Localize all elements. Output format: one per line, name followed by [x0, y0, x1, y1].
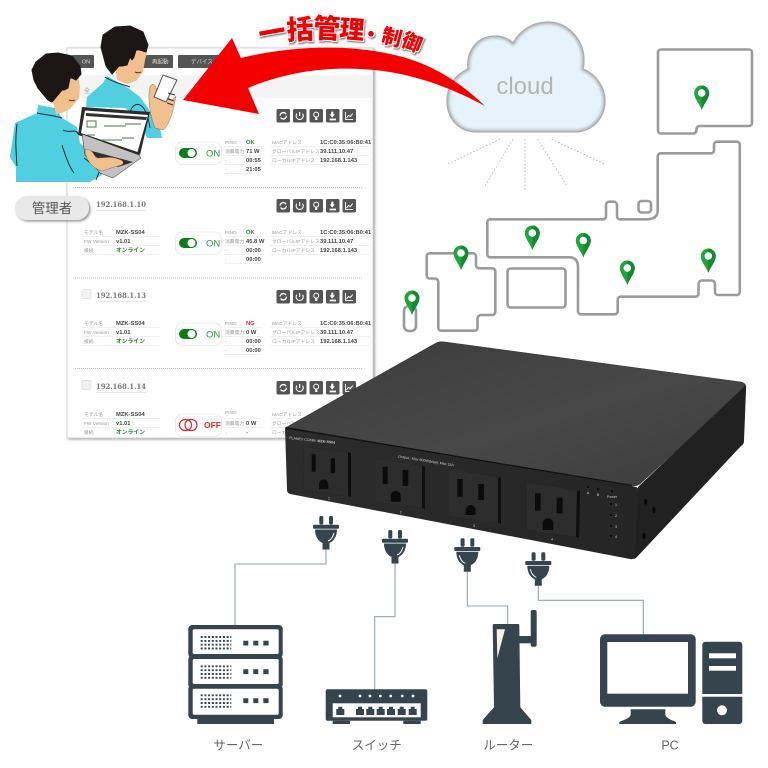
device row 3: 192.168.1.13: - [225, 340, 227, 345]
icon: cloud [447, 22, 605, 132]
pin: Fukuoka [454, 246, 468, 270]
band label: 全 [84, 87, 90, 95]
Sado island [638, 201, 651, 212]
device side face [632, 386, 746, 559]
device row 2: 192.168.1.10: - [225, 249, 227, 254]
device row 3: 192.168.1.13: 00:00 [246, 339, 261, 345]
device row 2: 192.168.1.10: FW Version [84, 239, 109, 245]
outlet 4: 4 [551, 538, 553, 542]
divider [75, 186, 362, 188]
device row 3: 192.168.1.13: 00:00 [246, 348, 261, 354]
outlet 2: 2 [400, 510, 402, 514]
status LEDs: A [587, 491, 590, 495]
device row 2: 192.168.1.10: MZK-SS04 [116, 230, 145, 236]
device row 1: 192.168.1.143 [320, 158, 358, 164]
device row 2: 192.168.1.10: 接続 [84, 247, 94, 254]
icon: server rack [188, 625, 283, 724]
device row 3: 192.168.1.13: 39.111.10.47 [320, 330, 353, 336]
status LEDs: 4 [615, 535, 617, 539]
device row 2: 192.168.1.10: - [225, 258, 227, 263]
device row 2: 192.168.1.10: OK [246, 230, 256, 236]
heading: 一括管理・制御: 管 [313, 13, 341, 44]
device row 2: 192.168.1.10: 39.111.10.47 [320, 239, 353, 245]
output rating label: Output : Max 800W(total), Max 15A [398, 455, 455, 467]
Okinawa [404, 306, 416, 331]
device row 4: 192.168.1.14 [82, 380, 370, 436]
signal rays from cloud [447, 139, 605, 192]
device row 2: 192.168.1.10: モデル名 [84, 229, 103, 236]
device row 4: 192.168.1.14: 接続 [84, 429, 94, 436]
device row 1: OK [246, 140, 256, 146]
device row 4: 192.168.1.14: ローカルIPアドレス [272, 430, 315, 436]
front person [10, 53, 102, 182]
icon: network switch [326, 689, 427, 724]
icon: router [483, 610, 537, 724]
phone and hand [149, 75, 177, 130]
Shikoku [508, 268, 566, 308]
device row 3: 192.168.1.13: モデル名 [84, 320, 103, 327]
icon: desktop PC [600, 634, 742, 724]
device row 3: 192.168.1.13: 1C:C0:35:06:B0:41 [320, 321, 372, 327]
device: MZK-SS04 smart power strip [285, 342, 746, 559]
device row 3: 192.168.1.13: 192.168.1.143 [320, 339, 358, 345]
device row 1: 00:55 [246, 158, 262, 164]
device row 3: 192.168.1.13: オンライン [116, 338, 145, 345]
device row 2: 192.168.1.10: 00:00 [246, 248, 261, 254]
device row 2: 192.168.1.10: オンライン [116, 247, 145, 254]
device row 2: 192.168.1.10: v1.01 [116, 239, 131, 245]
device row 4: 192.168.1.14: 0 W [246, 421, 257, 427]
device row 3: 192.168.1.13: 192.168.1.13 [96, 291, 146, 300]
heading: 一括管理・制御: ・ [361, 24, 381, 46]
device row 1: グローバルIPアドレス [272, 148, 320, 155]
device row 4: 192.168.1.14: モデル名 [84, 411, 103, 418]
outlet 4 [527, 483, 580, 542]
wires [235, 549, 643, 689]
device row 1: ローカルIPアドレス [272, 158, 315, 164]
status LEDs: Power [607, 495, 618, 499]
device row 4: 192.168.1.14: オンライン [116, 429, 145, 436]
toolbar buttons [72, 55, 240, 68]
device row 3: 192.168.1.13: FW Version [84, 330, 109, 336]
Hokkaido [658, 50, 752, 134]
device row 3: 192.168.1.13: MZK-SS04 [116, 321, 145, 327]
plug 3 [454, 538, 480, 572]
pin: central [576, 233, 591, 258]
device row 1: 消費電力 [225, 148, 244, 155]
device row 3: 192.168.1.13: NG [246, 321, 255, 327]
device row 2: 192.168.1.10: 消費電力 [225, 238, 244, 245]
device row 4: 192.168.1.14: PING [225, 410, 237, 416]
front top edge highlight [286, 428, 632, 486]
heading: 一括管理・制御: 制 [379, 24, 404, 52]
status LEDs: 2 [615, 514, 617, 518]
toolbar buttons: 再起動 [152, 58, 169, 66]
device row 1 [176, 109, 372, 174]
divider [75, 368, 362, 370]
device row 3: 192.168.1.13: MACアドレス [272, 321, 302, 327]
device row 4: 192.168.1.14: - [246, 430, 248, 436]
side screw holes [642, 499, 656, 539]
heading: 一括管理・制御: 理 [338, 15, 366, 45]
laptop [78, 107, 150, 178]
map of Japan [404, 50, 752, 331]
hands on keyboard [85, 149, 123, 171]
status LEDs: B [597, 493, 600, 497]
outlet 2 [376, 458, 425, 514]
status LEDs: 1 [615, 503, 617, 507]
outlet 1: 1 [328, 496, 330, 500]
device row 4: 192.168.1.14: MACアドレス [272, 412, 302, 418]
Honshu [487, 142, 740, 314]
device row 2: 192.168.1.10: PING [225, 230, 237, 236]
device row 3: 192.168.1.13: 消費電力 [225, 329, 244, 336]
device row 4: 192.168.1.14: OFF [204, 420, 221, 430]
back person [86, 26, 162, 138]
caption: サーバー: サーバー [213, 738, 263, 752]
device row 1: PING [225, 140, 237, 146]
caption: スイッチ: スイッチ [352, 738, 402, 752]
pin: Tokyo [701, 248, 716, 273]
pin: Kanazawa [525, 226, 540, 250]
device row 4: 192.168.1.14: FW Version [84, 421, 109, 427]
device row 1: - [225, 159, 227, 164]
device row 3: 192.168.1.13: v1.01 [116, 330, 131, 336]
device row 4: 192.168.1.14: v1.01 [116, 421, 131, 427]
device front face [285, 427, 638, 559]
device row 2: 192.168.1.10: 1C:C0:35:06:B0:41 [320, 230, 372, 236]
device row 4: 192.168.1.14: - [225, 431, 227, 436]
toolbar buttons: ON [82, 60, 90, 66]
device row 2: 192.168.1.10: グローバルIPアドレス [272, 238, 320, 245]
device row 3: 192.168.1.13: 接続 [84, 338, 94, 345]
brand label: PLANEX COMM. MZK-SS04 [289, 436, 335, 445]
device row 4: 192.168.1.14: 消費電力 [225, 420, 244, 427]
status LEDs [586, 485, 618, 539]
device row 3: 192.168.1.13: PING [225, 321, 237, 327]
device row 1: ON [206, 148, 220, 160]
divider [75, 277, 362, 279]
red arrow [183, 38, 485, 114]
status LEDs: 3 [615, 525, 617, 529]
pin: Nagoya [620, 260, 635, 285]
device row 2: 192.168.1.10: MACアドレス [272, 230, 302, 236]
outlet 3: 3 [473, 524, 475, 528]
device row 3: 192.168.1.13: ローカルIPアドレス [272, 339, 315, 345]
device row 3: 192.168.1.13: 0 W [246, 330, 257, 336]
plug 1 [313, 516, 339, 550]
toolbar buttons: デバイス [191, 58, 213, 66]
device row 2: 192.168.1.10: 45.8 W [246, 239, 265, 245]
device row 2: 192.168.1.10 [82, 199, 372, 264]
plug 2 [382, 530, 408, 564]
icon: cloud: cloud [496, 73, 554, 100]
heading: 一括管理・制御: 括 [286, 14, 314, 46]
pin: Hokkaido [694, 86, 709, 110]
device row 1: 71 W [246, 149, 260, 155]
device row 1: 1C:C0:35:06:B0:41 [320, 140, 372, 146]
device row 4: 192.168.1.14: グローバルIPアドレス [272, 420, 320, 427]
device row 2: 192.168.1.10: 00:00 [246, 257, 261, 263]
panel background [67, 48, 373, 438]
pin: Okinawa [404, 290, 420, 315]
device row 1: 39.111.10.47 [320, 149, 353, 155]
device row 2: 192.168.1.10: ローカルIPアドレス [272, 248, 315, 254]
heading: 一括管理・制御: 御 [398, 28, 425, 57]
device row 2: 192.168.1.10: ON [206, 238, 220, 250]
device row 3: 192.168.1.13: グローバルIPアドレス [272, 329, 320, 336]
device row 2: 192.168.1.10: 192.168.1.143 [320, 248, 358, 254]
label: 管理者: 管理者 [32, 201, 72, 216]
map pins [404, 86, 716, 315]
grey selection band [68, 75, 372, 98]
device row 3: 192.168.1.13: - [225, 349, 227, 354]
caption: PC: PC [661, 738, 679, 752]
device row 1: - [225, 168, 227, 173]
device row 4: 192.168.1.14: MZK-SS04 [116, 412, 145, 418]
label: 管理者 [15, 196, 89, 220]
device row 3: 192.168.1.13 [82, 290, 372, 354]
device row 1: 21:05 [246, 167, 262, 173]
panel: dashboard screenshot [67, 48, 373, 438]
outlet 3 [449, 469, 501, 528]
caption: ルーター: ルーター [483, 738, 533, 752]
device top face [285, 342, 746, 486]
device row 2: 192.168.1.10: 192.168.1.10 [96, 200, 146, 209]
icon: two administrators with phone and laptop [10, 26, 177, 182]
outlet 1 [303, 447, 351, 500]
device row 3: 192.168.1.13: ON [206, 330, 220, 340]
plug 4 [525, 552, 551, 586]
device row 1: MACアドレス [272, 140, 302, 146]
device row 4: 192.168.1.14: 192.168.1.14 [96, 382, 146, 391]
heading: 一括管理・制御: 一 [256, 16, 288, 50]
Kyushu [427, 253, 495, 331]
